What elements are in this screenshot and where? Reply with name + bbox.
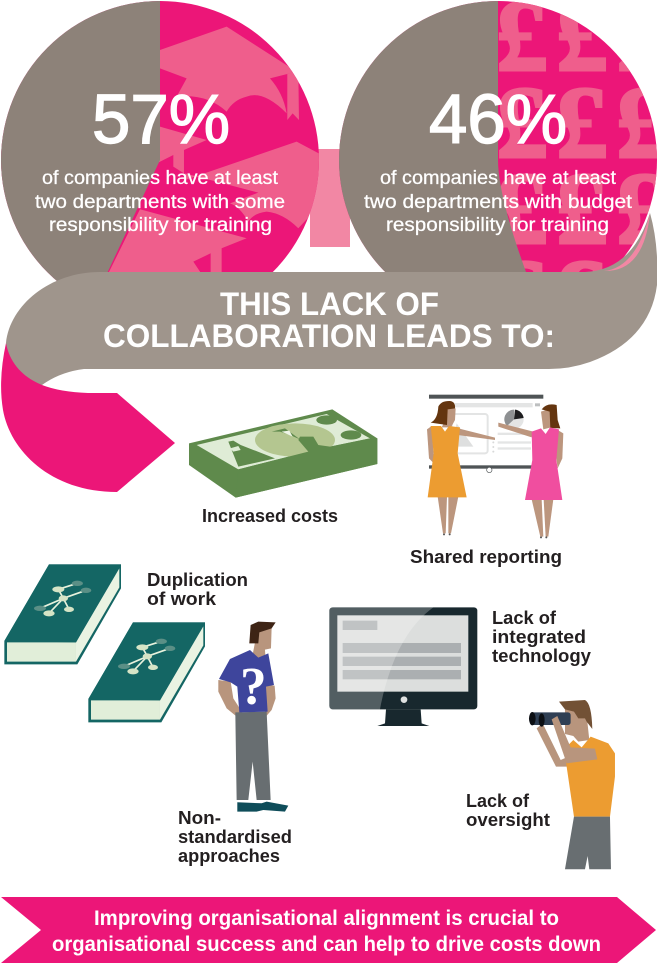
woman in pink dress [498,404,563,538]
stat description: of companies have at least [380,168,617,189]
label: duplication of work: Duplication [147,570,248,590]
label: lack of integrated technology: integrated [492,627,586,647]
icon: book one [4,564,121,664]
stat description: two departments with some [35,192,285,213]
ribbon banner [6,213,657,385]
pie chart with pound sign pattern: £ [496,66,548,180]
ribbon tail [1,343,175,492]
heading: COLLABORATION LEADS TO: [103,318,555,354]
icon: book two [88,622,205,722]
network symbol [118,639,175,674]
pie chart with graduation cap pattern [1,1,319,281]
label: lack of oversight [466,791,550,830]
icon: stack of money [189,409,377,498]
banner conclusion text: Improving organisational alignment is crucial to [94,907,559,930]
connecting band between circles [310,149,350,247]
icon: man with binoculars [529,700,615,869]
label: lack of integrated technology [492,608,591,666]
pie chart with pound sign pattern: £ [556,152,608,266]
label: duplication of work [147,570,248,609]
banner conclusion text: organisational success and can help to drive costs down [52,933,601,956]
icon: man with question mark: ? [240,656,267,716]
bottom arrow banner [1,897,656,963]
icon: man with question mark [218,622,288,812]
ribbon highlight [604,213,650,271]
stat description: two departments with budget [364,192,633,213]
icon: two women presenting [427,395,563,538]
woman in orange dress [427,401,495,535]
pie chart with pound sign pattern: £ [496,152,548,266]
label: shared reporting: Shared reporting [410,547,562,567]
label: lack of oversight: oversight [466,810,550,830]
panel: 46 percent stat [339,1,657,272]
pie chart with pound sign pattern: £ [556,239,608,353]
label: lack of oversight: Lack of [466,791,530,811]
label: non-standardised approaches: approaches [178,846,280,866]
stat description [364,168,633,236]
panel: 57 percent stat [1,1,319,281]
pie chart with pound sign pattern [339,1,657,272]
label: non-standardised approaches [178,808,292,866]
label: duplication of work: of work [147,589,217,609]
pie chart with pound sign pattern: £ [496,239,548,353]
pie chart with pound sign pattern: £ [556,66,608,180]
label: non-standardised approaches: standardised [178,827,292,847]
label: increased costs: Increased costs [202,506,338,526]
icon: computer monitor [329,607,477,726]
stat description: responsibility for training [49,215,272,236]
heading [103,286,555,354]
big number: 46% [429,80,567,158]
big number: 57% [92,80,230,158]
label: lack of integrated technology: Lack of [492,608,557,628]
heading: THIS LACK OF [220,286,439,322]
network symbol [34,581,91,616]
label: non-standardised approaches: Non- [178,808,221,828]
label: lack of integrated technology: technology [492,646,591,666]
stat description [35,168,285,236]
presentation screen [429,395,543,473]
banner conclusion text [52,907,601,956]
stat description: responsibility for training [386,215,609,236]
stat description: of companies have at least [42,168,279,189]
